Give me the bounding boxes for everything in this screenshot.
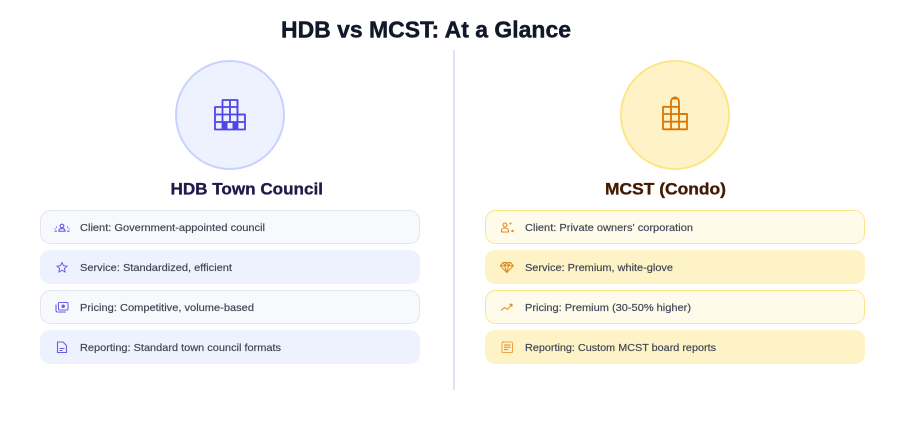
icon: star [57,262,67,272]
title: HDB vs MCST: At a Glance [281,16,571,42]
text: pricing: Pricing: Premium (30-50% higher) [525,303,691,314]
text: reporting: Reporting: Standard town council formats [80,343,281,354]
row: reporting [40,330,420,364]
text: client: Client: Private owners' corporation [525,223,693,234]
row: reporting [485,330,865,364]
row: service [40,250,420,284]
icon: diamond [500,262,513,272]
panel: HDB Town Council [40,61,420,364]
icon: report [502,342,512,352]
icon: owners [502,222,513,232]
panel: MCST (Condo) [485,61,865,364]
row: service [485,250,865,284]
icon: trend up [501,304,512,310]
icon: people [54,224,70,231]
icon: condo building in circle [621,61,729,169]
text: client: Client: Government-appointed council [80,223,265,234]
icon: money [56,302,68,312]
icon: document [58,342,66,352]
row: pricing [40,290,420,324]
heading: MCST (Condo): MCST (Condo) [605,179,726,198]
row: client [40,210,420,244]
row: client [486,210,864,244]
icon: HDB building in circle [176,61,284,169]
text: service: Service: Premium, white-glove [525,263,673,274]
text: reporting: Reporting: Custom MCST board reports [525,343,716,354]
heading: HDB Town Council: HDB Town Council [170,179,323,198]
row: pricing [486,290,864,324]
text: service: Service: Standardized, efficient [80,263,232,274]
text: pricing: Pricing: Competitive, volume-based [80,303,254,314]
